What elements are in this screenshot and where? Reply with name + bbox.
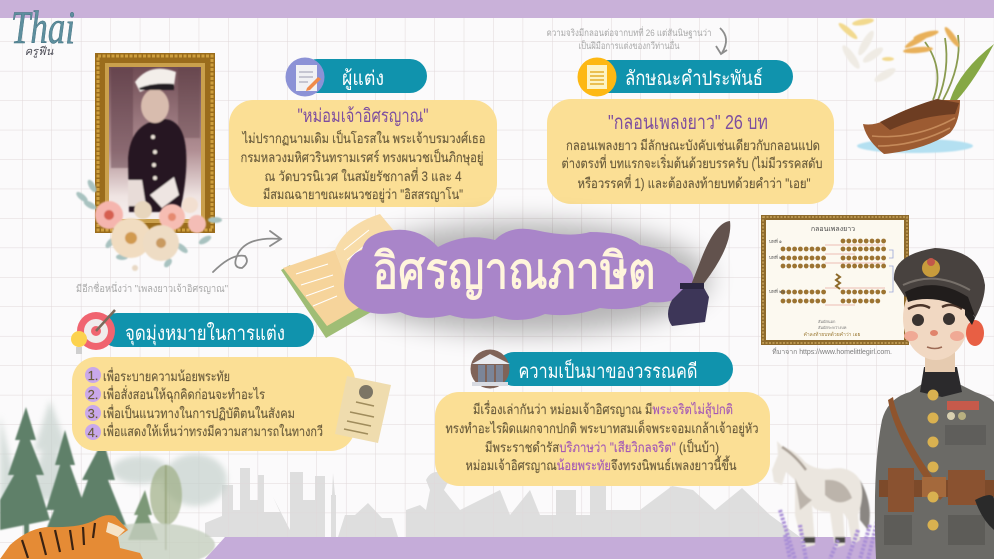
author card: กรมหลวงมหิศวรินทรามเรศร์ ทรงผนวชเป็นภิกษุอยู่ (240, 148, 484, 166)
verse form card: "กลอนเพลงยาว" 26 บท (608, 112, 768, 134)
purpose header pill (71, 310, 314, 354)
purpose list item 1: 1. (88, 368, 98, 383)
logo: ครูฟีน (25, 45, 54, 58)
purpose header pill: จุดมุ่งหมายในการแต่ง (125, 322, 285, 346)
purpose list item 3 (85, 404, 295, 421)
city skyline silhouette (205, 468, 800, 537)
inkwell and quill (668, 221, 730, 326)
verse diagram: บทที่ ๒๖ (769, 288, 785, 294)
verse form card: กลอนเพลงยาว มีลักษณะบังคับเช่นเดียวกับกลอนแปด (566, 138, 820, 153)
panel: author (229, 58, 497, 207)
panel: literary origin (435, 350, 770, 486)
tiger (0, 515, 143, 559)
verse diagram: บทที่ ๑ (769, 238, 782, 244)
open book (281, 214, 395, 338)
verse diagram: คำลงท้ายบทด้วยคำว่า เอย (804, 331, 861, 338)
purpose list item 2: 2. (88, 387, 98, 402)
horse (772, 441, 870, 548)
author card: ไม่ปรากฏนามเดิม เป็นโอรสใน พระเจ้าบรมวงศ์เธอ (242, 129, 486, 146)
author header pill (286, 58, 427, 96)
verse form header pill (578, 58, 793, 96)
title cloud with heading: อิศรญาณภาษิต (372, 243, 656, 299)
verse diagram: สัมผัสนอก (818, 319, 836, 324)
side dark patch (975, 495, 994, 530)
author card: "หม่อมเจ้าอิศรญาณ" (298, 106, 428, 127)
bottom band (205, 537, 994, 559)
rice plant and boat (857, 25, 994, 154)
author header pill: ผู้แต่ง (342, 68, 384, 91)
trees (0, 400, 227, 559)
verse form card (547, 99, 834, 204)
purpose list item 2 (85, 385, 265, 403)
origin card (435, 392, 770, 486)
title cloud with heading (344, 229, 693, 320)
lavender (780, 510, 880, 559)
soldier character (875, 248, 994, 559)
top band (0, 0, 994, 18)
caption: other name: มีอีกชื่อหนึ่งว่า "เพลงยาวเจ้าอิศรญาณ" (76, 281, 228, 295)
verse form card: หรือวรรคที่ 1) และต้องลงท้ายบทด้วยคำว่า "เอย" (578, 174, 811, 191)
book cover document (335, 376, 391, 443)
purpose list item 1: เพื่อระบายความน้อยพระทัย (103, 367, 230, 384)
portrait frame (95, 53, 215, 233)
title shadow (340, 222, 710, 334)
purpose list item 3: 3. (88, 406, 98, 421)
verse diagram: สัมผัสระหว่างบท (818, 325, 847, 330)
arrow: curly grey (213, 231, 281, 272)
note: poem count: เป็นฝีมือการแต่งของกวีท่านอื่น (578, 39, 680, 52)
flowers under portrait (75, 178, 222, 271)
verse form card: ต่างตรงที่ บทแรกจะเริ่มต้นด้วยบรรครับ (ไม่มีวรรคสดับ (562, 154, 822, 171)
purpose list item 4: 4. (88, 425, 98, 440)
origin card: ทรงทำอะไรผิดแผกจากปกติ พระบาทสมเด็จพระจอมเกล้าเจ้าอยู่หัว (446, 419, 758, 437)
note: poem count: ความจริงมีกลอนต่อจากบทที่ 26 แต่สันนิษฐานว่า (546, 26, 712, 39)
author card: ณ วัดบวรนิเวศ ในสมัยรัชกาลที่ 3 และ 4 (264, 167, 462, 184)
origin header pill (470, 350, 733, 388)
verse diagram: บทที่ ๒ (769, 254, 782, 260)
origin header pill: ความเป็นมาของวรรณคดี (518, 358, 698, 383)
verse diagram (761, 215, 909, 345)
purpose list item 4 (85, 422, 323, 440)
purpose list item 4: เพื่อแสดงให้เห็นว่าทรงมีความสามารถในทางกวี (103, 422, 323, 439)
purpose card (72, 357, 355, 451)
note: poem count (546, 26, 727, 54)
origin card: มีเรื่องเล่ากันว่า หม่อมเจ้าอิศรญาณ มีพระจริตไม่สู้ปกติ (473, 400, 733, 418)
origin card: หม่อมเจ้าอิศรญาณน้อยพระทัยจึงทรงนิพนธ์เพลงยาวนี้ขึ้น (466, 455, 736, 473)
purpose list item 2: เพื่อสั่งสอนให้ฉุกคิดก่อนจะทำอะไร (103, 385, 265, 403)
purpose list item 3: เพื่อเป็นแนวทางในการปฏิบัติตนในสังคม (103, 404, 295, 421)
panel: verse form (547, 58, 834, 204)
origin card: มีพระราชดำรัสบริภาษว่า "เสียวิกลจริต" (เป็นบ้า) (485, 438, 719, 455)
author card (229, 100, 497, 207)
purpose list item 1 (85, 367, 230, 384)
source caption: ที่มาจาก https://www.homelittlegirl.com. (772, 347, 892, 356)
panel: purpose (71, 310, 391, 451)
author card: มีสมณฉายาขณะผนวชอยู่ว่า "อิสสรญาโน" (263, 186, 463, 203)
verse diagram: กลอนเพลงยาว (811, 226, 855, 233)
rice grains (837, 17, 897, 84)
logo: Thai (11, 2, 75, 54)
verse form header pill: ลักษณะคำประพันธ์ (625, 67, 763, 90)
